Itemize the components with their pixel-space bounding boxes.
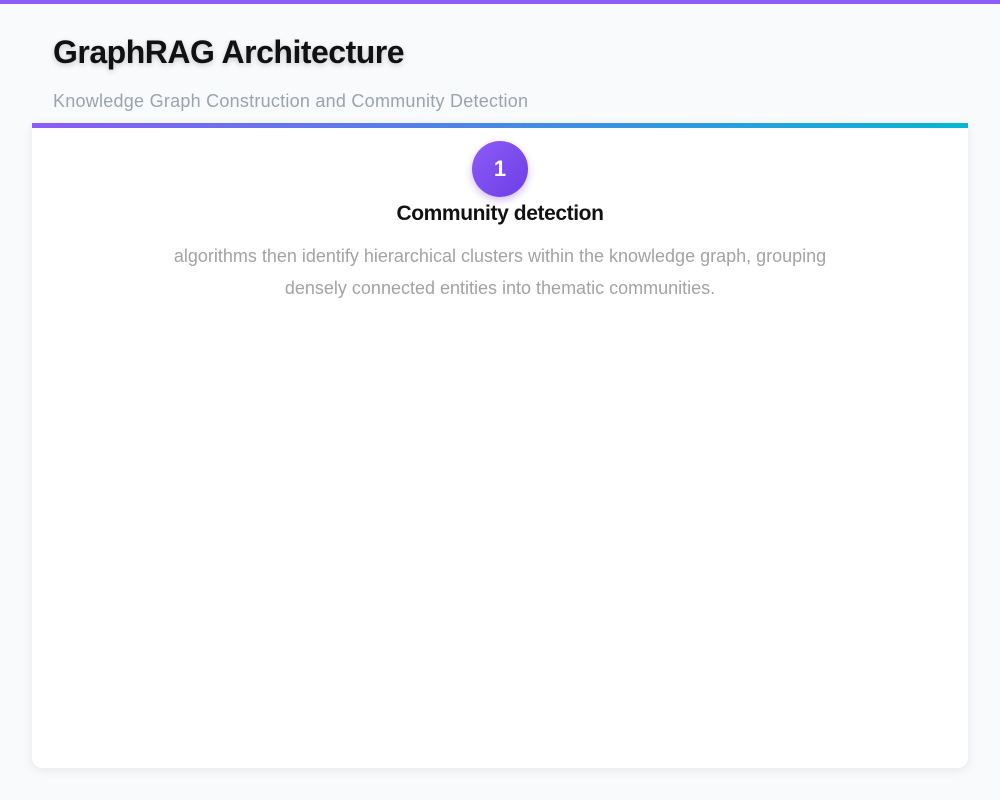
panel: community detection card (32, 123, 968, 768)
text block: description: algorithms then identify hierarchical clusters within the knowledge graph, grouping densely connected entities into thematic communities. (174, 246, 826, 298)
subtitle: Knowledge Graph Construction and Community Detection (53, 91, 528, 111)
top accent bar (0, 0, 1000, 4)
title: GraphRAG Architecture (53, 34, 404, 70)
heading: Community detection (396, 202, 604, 225)
icon: step number badge (472, 141, 528, 197)
icon: step number badge: 1 (494, 156, 506, 181)
